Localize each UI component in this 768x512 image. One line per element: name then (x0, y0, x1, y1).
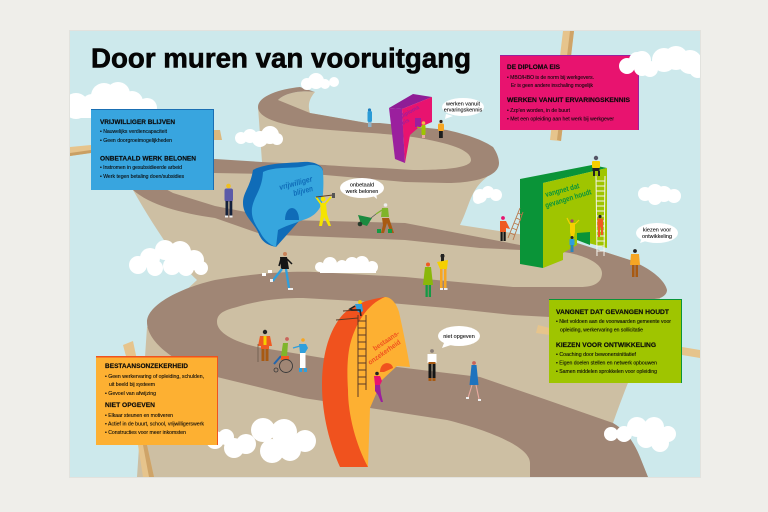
wall: vrijwilliger blijven (243, 162, 323, 247)
bullets: bestaansonzekerheid: • Gevoel van afwijzing (105, 391, 156, 397)
bullets: bestaansonzekerheid: • Geen werkervaring of opleiding, schulden, (105, 374, 204, 380)
bullets: vrijwilliger blijven (100, 129, 172, 144)
bullets: niet opgeven: • Elkaar steunen en motiveren (105, 413, 173, 419)
bullets: werken vanuit ervaringskennis: • Zzp'en worden, in de buurt (507, 108, 571, 114)
heading: bestaansonzekerheid: BESTAANSONZEKERHEID (105, 363, 188, 370)
figure: woman in blue dress (466, 361, 481, 401)
speech bubble: kiezen voor ontwikkeling: ontwikkeling (642, 234, 672, 240)
figure: woman in green dress (423, 262, 433, 297)
heading: kiezen voor ontwikkeling: KIEZEN VOOR ONTWIKKELING (556, 342, 656, 349)
figure: person in wheelchair (274, 337, 292, 372)
mountain body (133, 91, 667, 477)
bullets: vrijwilliger blijven: • Nauwelijks verdiencapaciteit (100, 129, 168, 135)
figure: person sitting on green wall (592, 156, 600, 176)
speech bubble: werken vanuit ervaringskennis (442, 98, 484, 119)
bullets: de diploma eis: • MBO/HBO is de norm bij werkgevers. (507, 75, 594, 81)
speech bubble: kiezen voor ontwikkeling: kiezen voor (643, 228, 671, 234)
wall: vangnet dat gevangen houdt: gevangen houdt (544, 187, 593, 210)
wall: vrijwilliger blijven: blijven (292, 184, 314, 198)
bullets: kiezen voor ontwikkeling: • Eigen doelen stellen en netwerk opbouwen (556, 360, 657, 366)
bullets: vangnet dat gevangen houdt (556, 319, 671, 334)
ladder: wooden at green wall (508, 208, 523, 240)
bullets: niet opgeven: • Actief in de buurt, school, vrijwilligerswerk (105, 422, 204, 428)
cloud: right (638, 184, 681, 205)
wall: bestaansonzekerheid: onzekerheid (367, 339, 402, 367)
heading: de diploma eis: DE DIPLOMA EIS (507, 64, 561, 71)
wall: diploma eis: diploma (400, 104, 421, 120)
figure: woman with blue sweater (224, 184, 233, 218)
bullets: onbetaald werk belonen: • Instromen in gesubsidieerde arbeid (100, 165, 182, 171)
bullets: kiezen voor ontwikkeling (556, 352, 657, 375)
cloud: top centre (301, 73, 339, 90)
speech bubble: werken vanuit ervaringskennis: ervaringskennis (444, 108, 483, 114)
figure: worker in yellow with hammer (316, 193, 335, 226)
bullets: niet opgeven: • Constructies voor meer inkomsten (105, 430, 186, 436)
figure: man with cane (258, 330, 272, 362)
figure: person with wheelbarrow (358, 203, 394, 233)
speech bubble: niet opgeven: niet opgeven (443, 334, 475, 340)
figure: climber on orange wall (350, 300, 363, 316)
sky background (70, 31, 700, 477)
wall: diploma eis: eis (401, 118, 411, 127)
bullets: de diploma eis (507, 75, 594, 89)
bullets: niet opgeven (105, 413, 204, 436)
winding road (110, 87, 667, 477)
cloud: right of blue box (235, 126, 283, 147)
panel: de diploma eis (500, 55, 639, 130)
figure: woman in yellow (437, 254, 448, 290)
bullets: onbetaald werk belonen: • Werk tegen betaling doen/subsidies (100, 174, 184, 180)
wall: bestaansonzekerheid: bestaans- (372, 330, 401, 353)
figure: runner in black (262, 252, 293, 290)
figure: woman at diploma door (417, 121, 426, 138)
wall: diploma eis (389, 94, 432, 163)
wall: vangnet dat gevangen houdt: vangnet dat (544, 181, 581, 199)
bullets: werken vanuit ervaringskennis: • Met een opleiding aan het werk bij werkgever (507, 116, 614, 122)
heading: onbetaald werk belonen: ONBETAALD WERK BELONEN (100, 156, 196, 162)
bullets: vangnet dat gevangen houdt: • Niet voldoen aan de voorwaarden gemeente voor (556, 319, 671, 325)
figure: person in red near ladder (500, 216, 510, 241)
figure: woman in pink at orange wall (374, 372, 383, 402)
cloud: bottom right (604, 417, 676, 452)
figure: person in blue carrying painter (570, 236, 574, 252)
bullets: werken vanuit ervaringskennis (507, 108, 614, 122)
ladder: white at green wall (596, 176, 605, 256)
cloud: centre (315, 256, 378, 273)
heading: niet opgeven: NIET OPGEVEN (105, 402, 155, 409)
cloud: left middle (129, 240, 208, 276)
figure: climber in red (598, 215, 603, 237)
bullets: vrijwilliger blijven: • Geen doorgroeimogelijkheden (100, 138, 172, 144)
speech bubble: onbetaald werk belonen: onbetaald (350, 182, 374, 188)
wall: vrijwilliger blijven: vrijwilliger (278, 174, 314, 192)
figure: man in orange on top road (438, 120, 444, 138)
figure: man in white shirt (428, 349, 436, 381)
bullets: kiezen voor ontwikkeling: • Coaching door bewonersinitiatief (556, 352, 637, 358)
wooden post foreground (138, 325, 550, 477)
heading: vrijwilliger blijven: VRIJWILLIGER BLIJVEN (100, 119, 175, 126)
wall: bestaansonzekerheid (322, 297, 410, 467)
wall: vangnet dat gevangen houdt (520, 165, 607, 268)
figure: painter in yellow standing on shoulders (567, 218, 579, 237)
panel: bestaansonzekerheid (96, 356, 218, 445)
figure: person in blue on top road (368, 108, 372, 127)
wooden posts (70, 31, 700, 360)
bullets: kiezen voor ontwikkeling: • Samen middelen sprokkelen voor opleiding (556, 369, 657, 375)
ladder: brown at orange wall (336, 310, 366, 397)
heading: vangnet dat gevangen houdt: VANGNET DAT GEVANGEN HOUDT (556, 309, 669, 316)
cloud: top right (638, 46, 700, 78)
figure: carer in blue (293, 338, 308, 372)
bullets: onbetaald werk belonen (100, 165, 184, 180)
speech bubble: niet opgeven (438, 326, 480, 348)
speech bubble: onbetaald werk belonen (340, 178, 384, 199)
bullets: bestaansonzekerheid: uit beeld bij systeem (109, 382, 155, 388)
panel: vrijwilliger blijven (91, 109, 214, 190)
bullets: vangnet dat gevangen houdt: opleiding, werkervaring en sollicitatie (560, 328, 643, 334)
figure: man in orange right side (630, 249, 640, 277)
cloud: bottom centre (206, 418, 316, 463)
cloud: over pink panel (619, 52, 650, 76)
title: Door muren van vooruitgang (91, 42, 471, 74)
panel: vangnet dat gevangen houdt (549, 299, 682, 383)
cloud: top left (63, 82, 157, 119)
bullets: bestaansonzekerheid (105, 374, 204, 397)
cloud behind tower (473, 186, 502, 204)
speech bubble: werken vanuit ervaringskennis: werken vanuit (445, 102, 480, 108)
speech bubble: onbetaald werk belonen: werk belonen (345, 189, 378, 195)
bullets: de diploma eis: Er is geen andere inschaling mogelijk (511, 83, 593, 89)
speech bubble: kiezen voor ontwikkeling (636, 223, 678, 243)
heading: werken vanuit ervaringskennis: WERKEN VANUIT ERVARINGSKENNIS (507, 97, 631, 104)
